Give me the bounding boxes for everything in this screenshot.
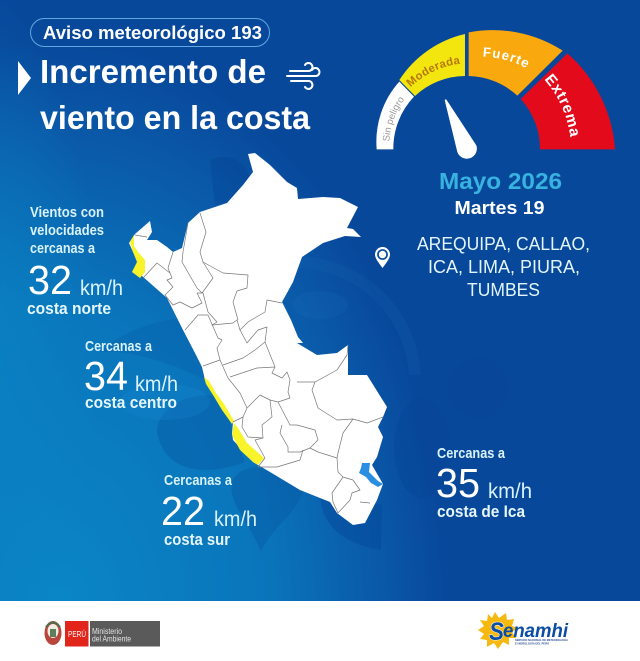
map of Peru — [129, 153, 387, 525]
gauge segment: sin peligro: Sin peligro — [382, 97, 404, 141]
date heading — [439, 168, 562, 218]
wind gauge — [376, 30, 615, 159]
logo: Ministerio del Ambiente — [44, 621, 160, 646]
notice pill: Aviso meteorológico 193 — [43, 23, 262, 43]
callout: costa de Ica: 35 — [436, 460, 480, 506]
callout: costa sur: 22 — [161, 488, 205, 534]
callout: costa norte: km/h — [80, 277, 123, 300]
title — [40, 53, 311, 136]
department boundaries — [135, 213, 383, 513]
title: Incremento de — [40, 53, 266, 90]
affected regions list: ICA, LIMA, PIURA, — [428, 257, 580, 277]
logo: Senamhi — [478, 612, 569, 649]
affected regions list: AREQUIPA, CALLAO, — [417, 234, 590, 254]
logo: Ministerio del Ambiente: PERÚ — [68, 629, 86, 639]
gauge segment: sin peligro — [376, 82, 414, 150]
callout: costa norte: Vientos con — [30, 204, 104, 221]
affected regions list — [417, 234, 590, 300]
sun watermark — [100, 157, 508, 552]
logo: Ministerio del Ambiente: Ministerio — [92, 627, 122, 636]
callout: costa de Ica — [436, 445, 532, 521]
logo: Senamhi: enamhi — [503, 621, 569, 642]
callout: costa centro: km/h — [135, 373, 178, 396]
callout: costa norte — [27, 204, 123, 318]
gauge segment: moderada: Moderada — [406, 56, 460, 87]
callout: costa de Ica: Cercanas a — [437, 445, 506, 462]
date heading: Mayo 2026 — [439, 168, 562, 194]
notice pill — [30, 18, 270, 46]
callout: costa de Ica: km/h — [488, 480, 532, 503]
yellow zone: costa norte — [130, 235, 145, 278]
gauge needle — [445, 99, 477, 159]
blue zone: costa de Ica — [359, 463, 383, 487]
logo: Ministerio del Ambiente: del Ambiente — [92, 634, 131, 644]
logo: Senamhi: E HIDROLOGÍA DEL PERÚ — [515, 640, 549, 646]
gauge segment: fuerte: Fuerte — [484, 47, 528, 68]
callout: costa de Ica: costa de Ica — [437, 502, 525, 521]
yellow zone: costa centro — [204, 377, 234, 424]
title arrow icon — [18, 61, 31, 95]
icon: coat of arms — [44, 621, 62, 645]
icon: sun — [478, 612, 518, 649]
callout: costa centro — [84, 338, 178, 412]
callout: costa sur: km/h — [214, 508, 257, 531]
date heading: Martes 19 — [454, 198, 544, 218]
gauge segment: extrema: Extrema — [544, 73, 578, 138]
yellow zone: costa sur — [232, 423, 264, 465]
gauge segment: moderada — [399, 34, 465, 96]
logo: Senamhi: SERVICIO NACIONAL DE METEOROLOGÍA — [515, 637, 568, 642]
map outline — [129, 153, 387, 525]
icon: wind — [287, 63, 319, 89]
gauge segment: extrema — [520, 53, 615, 150]
callout: costa sur — [161, 472, 257, 549]
logo: Senamhi: S — [489, 618, 504, 646]
callout: costa centro: 34 — [84, 353, 128, 399]
callout: costa norte: velocidades — [30, 222, 104, 239]
callout: costa centro: costa centro — [85, 393, 177, 412]
affected regions list: TUMBES — [467, 280, 540, 300]
gauge segment: fuerte — [468, 30, 563, 96]
callout: costa norte: 32 — [28, 257, 72, 303]
callout: costa norte: costa norte — [27, 299, 111, 318]
callout: costa norte: cercanas a — [30, 240, 96, 257]
footer band — [0, 601, 640, 661]
callout: costa sur: Cercanas a — [164, 472, 233, 489]
callout: costa centro: Cercanas a — [85, 338, 153, 355]
icon: location pin — [375, 247, 390, 268]
title: viento en la costa — [40, 99, 311, 136]
callout: costa sur: costa sur — [164, 530, 230, 549]
